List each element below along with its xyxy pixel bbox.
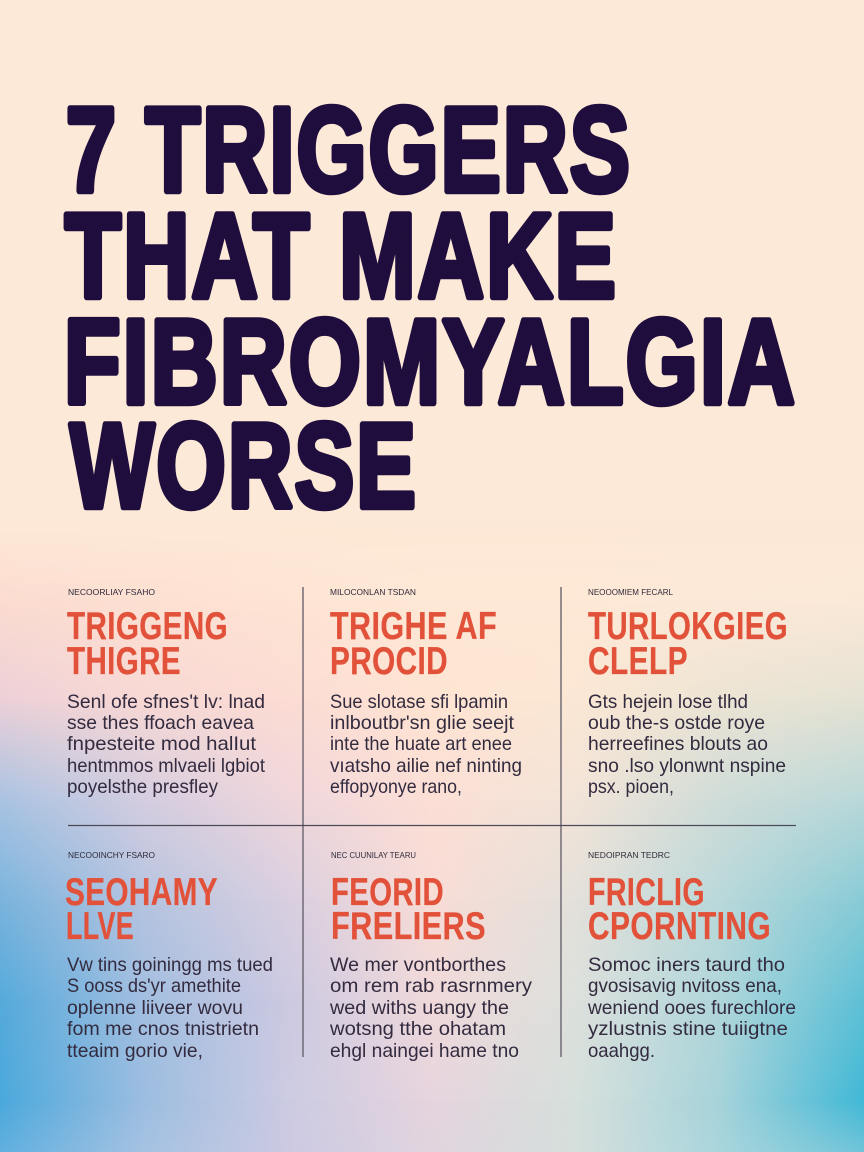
panel: bottom middle trigger: [329, 850, 532, 1062]
panel: bottom left trigger: oplenne liiveer wovu: [67, 997, 243, 1019]
panel: bottom middle trigger: NEC CUUNILAY TEARU: [331, 850, 416, 860]
panel: bottom right trigger: gvosisavig nvitoss ena,: [588, 975, 782, 997]
panel: bottom right trigger: FRICLIG: [588, 871, 705, 914]
panel: top middle trigger: MILOCONLAN TSDAN: [330, 587, 416, 597]
panel: top right trigger: herreefines blouts ao: [588, 733, 768, 755]
panel: top left trigger: NECOORLIAY FSAHO: [68, 587, 155, 597]
panel: bottom right trigger: Somoc iners taurd tho: [588, 954, 785, 976]
panel: top middle trigger: vıatsho ailie nef ninting: [330, 755, 522, 777]
panel: bottom left trigger: tteaim gorio vie,: [67, 1040, 203, 1062]
panel: bottom left trigger: S ooss ds'yr amethite: [67, 975, 241, 997]
panel: top middle trigger: inlboutbr'sn glie seejt: [330, 712, 515, 734]
panel: top middle trigger: effopyonye rano,: [330, 776, 462, 798]
title: WORSE: [70, 399, 418, 533]
panel: top middle trigger: [330, 587, 522, 798]
panel: bottom left trigger: [65, 850, 273, 1062]
panel: top left trigger: Senl ofe sfnes't lv: lnad: [67, 691, 265, 713]
panel: bottom middle trigger: wed withs uangy the: [329, 997, 509, 1019]
panel: bottom right trigger: yzlustnis stine tuiigtne: [588, 1018, 788, 1040]
panel: bottom left trigger: LLVE: [66, 905, 134, 948]
title: [64, 83, 797, 533]
panel: bottom middle trigger: FRELIERS: [331, 905, 486, 948]
panel: top middle trigger: TRIGHE AF: [330, 605, 497, 648]
panel: top right trigger: [588, 587, 788, 798]
panel: top right trigger: psx. pioen,: [588, 776, 674, 798]
title: THAT MAKE: [65, 189, 618, 323]
panel: top middle trigger: inte the huate art enee: [330, 733, 512, 755]
panel: top middle trigger: PROCID: [330, 640, 448, 683]
panel: bottom middle trigger: We mer vontborthes: [330, 954, 506, 976]
panel: bottom left trigger: SEOHAMY: [65, 871, 218, 914]
panel: bottom middle trigger: om rem rab rasrnmery: [330, 975, 532, 997]
panel: bottom right trigger: NEDOIPRAN TEDRC: [588, 850, 670, 860]
panel: bottom middle trigger: FEORID: [331, 871, 444, 914]
panel: bottom right trigger: oaahgg.: [588, 1040, 655, 1062]
panel: bottom middle trigger: wotsng tthe ohatam: [329, 1018, 506, 1040]
panel: top right trigger: sno .lso ylonwnt nspine: [588, 755, 786, 777]
panel: top right trigger: oub the-s ostde roye: [588, 712, 765, 734]
title: 7 TRIGGERS: [66, 83, 632, 217]
panel: bottom right trigger: weniend ooes furechlore: [587, 997, 796, 1019]
panel: bottom right trigger: CPORNTING: [588, 905, 771, 948]
panel: top right trigger: NEOOOMIEM FECARL: [588, 587, 673, 597]
panel: top right trigger: CLELP: [588, 640, 688, 683]
panel: bottom middle trigger: ehgl naingei hame tno: [330, 1040, 519, 1062]
panel: top right trigger: TURLOKGIEG: [588, 605, 788, 648]
panel: bottom left trigger: NECOOINCHY FSARO: [68, 850, 155, 860]
panel: top left trigger: poyelsthe presfley: [67, 776, 218, 798]
panel: top middle trigger: Sue slotase sfi lpamin: [330, 691, 508, 713]
panel: bottom left trigger: fom me cnos tnistrietn: [67, 1018, 259, 1040]
panel: bottom right trigger: [587, 850, 796, 1062]
panel: top right trigger: Gts hejein lose tlhd: [588, 691, 748, 713]
panel: top left trigger: [67, 587, 266, 798]
background gradient: [0, 572, 864, 1152]
panel: top left trigger: fnpesteite mod halIut: [67, 733, 257, 755]
panel: top left trigger: THIGRE: [67, 640, 181, 683]
panel: bottom left trigger: Vw tins goiningg ms tued: [67, 954, 273, 976]
panel: top left trigger: hentmmos mlvaeli lgbiot: [67, 755, 266, 777]
panel: top left trigger: sse thes ffoach eavea: [67, 712, 254, 734]
panel: top left trigger: TRIGGENG: [67, 605, 228, 648]
